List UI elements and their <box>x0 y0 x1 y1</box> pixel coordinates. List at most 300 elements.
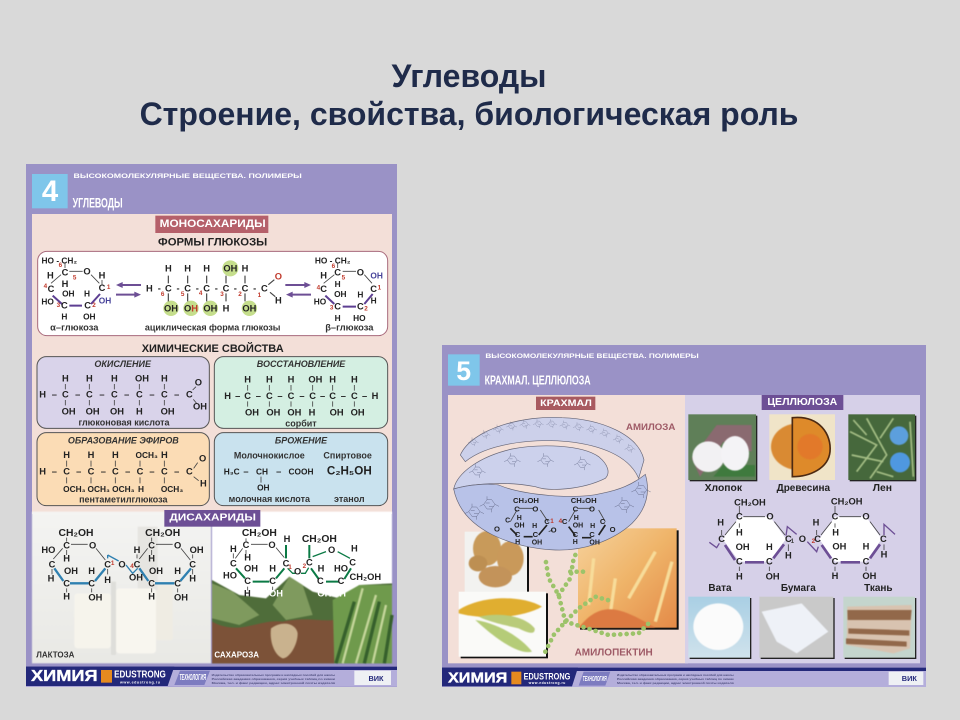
chart: amylose ribbon: C <box>573 530 579 539</box>
chart: cellulose structure: H <box>785 551 792 561</box>
chart: alpha glucose <box>41 256 111 332</box>
panel: chemical properties: ХИМИЧЕСКИЕ СВОЙСТВА <box>142 342 284 355</box>
footer: poster 5: Издательство образовательных программ и наглядных пособий для школы <box>617 673 734 677</box>
chart: beta glucose: C <box>320 284 327 294</box>
footer: poster 5: Российская академия образования, серия учебных таблиц по химии <box>617 677 734 681</box>
panel: reduction: ВОССТАНОВЛЕНИЕ <box>257 359 346 369</box>
chart: sucrose: CH₂OH <box>242 528 277 539</box>
panel: fermentation: БРОЖЕНИЕ <box>275 436 328 446</box>
panel: reduction: H <box>266 374 273 384</box>
chart: acyclic glucose: - <box>158 283 161 293</box>
chart: cellulose structure: C <box>880 534 887 544</box>
chart: beta glucose: C <box>370 284 377 294</box>
chart: sucrose: C <box>230 558 237 568</box>
chart: acyclic glucose: 3 <box>220 291 224 298</box>
chart: alpha glucose: 4 <box>44 283 48 290</box>
chart: lactose: C <box>88 579 95 589</box>
chart: alpha glucose: H <box>99 271 106 281</box>
chart: beta glucose: HO <box>314 296 327 306</box>
chart: beta glucose: 6 <box>332 263 336 270</box>
chart: alpha glucose: OH <box>62 288 75 298</box>
panel: oxidation: H <box>161 373 168 383</box>
chart: alpha glucose: H <box>62 279 69 289</box>
arrows: right equilibrium <box>285 282 311 298</box>
panel: fermentation: COOH <box>288 467 313 477</box>
panel: ester formation: – <box>125 467 130 477</box>
chart: sucrose: O <box>268 540 276 550</box>
chart: amylose ribbon: C <box>573 504 579 513</box>
chart: cellulose structure: O <box>799 534 806 544</box>
panel: poster 5 header: 5 <box>456 356 471 386</box>
chart: cellulose structure: H <box>813 518 820 528</box>
panel: poster 4 header: ВЫСОКОМОЛЕКУЛЯРНЫЕ ВЕЩЕСТВА. ПОЛИМЕРЫ <box>73 173 302 180</box>
chart: alpha glucose: 1 <box>107 284 111 291</box>
chart: beta glucose: OH <box>334 289 347 299</box>
chart: amylose ribbon: C <box>514 504 520 513</box>
chart: alpha glucose: OH <box>83 311 96 321</box>
chart: amylose ribbon: H <box>590 523 595 530</box>
chart: acyclic glucose: 5 <box>181 291 185 298</box>
panel: ester formation: – <box>76 467 81 477</box>
footer: poster 4: EDUSTRONG <box>114 669 166 680</box>
chart: sucrose: H <box>230 544 237 554</box>
chart: sucrose: OH <box>269 588 283 598</box>
chart: lactose: OH <box>88 593 103 603</box>
chart: lactose: OH <box>190 545 204 555</box>
panel: reduction: – <box>299 391 305 401</box>
panel: fermentation: C₂H₅OH <box>327 464 372 477</box>
chart: amylose ribbon: C <box>600 517 606 526</box>
panel: reduction: C <box>351 391 358 401</box>
panel: starch: АМИЛОЗА <box>626 422 676 432</box>
chart: amylose ribbon: OH <box>514 522 525 529</box>
panel: fermentation: – <box>276 467 281 477</box>
chart: amylose ribbon: O <box>532 504 538 513</box>
panel: starch: АМИЛОПЕКТИН <box>575 647 653 658</box>
panel: ester formation: H <box>63 450 70 460</box>
panel: oxidation: C <box>161 389 168 399</box>
chart: lactose: H <box>174 566 181 576</box>
chart: beta glucose: β–глюкоза <box>325 322 374 332</box>
chart: sucrose: C <box>338 576 345 586</box>
footer: poster 4: Издательство образовательных программ и наглядных пособий для школы <box>212 673 335 677</box>
panel: reduction: OH <box>287 408 302 418</box>
panel: ester formation: OCH₃ <box>112 484 135 494</box>
chart: cellulose structure: OH <box>862 571 877 581</box>
panel: ester formation: C <box>63 467 70 477</box>
panel: monosaccharides: ФОРМЫ ГЛЮКОЗЫ <box>158 237 267 249</box>
panel: oxidation: – <box>99 389 105 399</box>
chart: alpha glucose: 5 <box>73 274 77 281</box>
chart: alpha glucose: C <box>62 267 69 277</box>
panel: cellulose: ЦЕЛЛЮЛОЗА <box>767 397 837 408</box>
chart: lactose: CH₂OH <box>145 528 180 539</box>
panel: fermentation: Спиртовое <box>323 450 372 460</box>
chart: sucrose: H <box>318 563 325 573</box>
panel: fermentation: этанол <box>334 494 365 504</box>
chart: sucrose: H <box>351 543 358 553</box>
panel: reduction: H <box>309 408 316 418</box>
chart: acyclic glucose: C <box>242 283 249 293</box>
chart: amylose ribbon: OH <box>532 539 542 546</box>
photo: sugar beet and cane <box>212 512 392 663</box>
panel: fermentation <box>214 433 388 506</box>
panel: monosaccharides <box>32 214 392 514</box>
panel: reduction: – <box>320 391 325 401</box>
chart: alpha glucose: H <box>84 288 90 298</box>
chart: acyclic glucose: OH <box>223 263 238 273</box>
panel: oxidation: H <box>62 373 69 383</box>
chart: lactose: H <box>104 575 111 585</box>
chart: acyclic glucose: - <box>234 283 237 293</box>
photo: cotton <box>688 414 757 481</box>
panel: ester formation: ОБРАЗОВАНИЕ ЭФИРОВ <box>68 436 179 446</box>
chart: acyclic glucose: H <box>242 263 249 273</box>
chart: acyclic glucose: - <box>253 283 256 293</box>
chart: alpha glucose: C <box>48 284 55 294</box>
chart: lactose: ЛАКТОЗА <box>36 650 75 659</box>
chart: cellulose structure: 2 <box>812 538 816 545</box>
chart: lactose: OH <box>149 566 163 576</box>
panel: ester formation: H <box>112 450 119 460</box>
panel: oxidation: – <box>174 389 179 399</box>
chart: amylose ribbon: H <box>532 523 537 530</box>
chart: beta glucose: 5 <box>342 274 346 281</box>
photo: paper <box>759 597 835 659</box>
panel: reduction: OH <box>245 408 259 418</box>
panel: starch: КРАХМАЛ <box>540 398 592 408</box>
panel: cellulose: Хлопок <box>705 483 743 494</box>
chart: alpha glucose: 3 <box>57 302 61 309</box>
chart: cellulose structure: 1 <box>791 538 795 545</box>
chart: alpha glucose: 6 <box>59 262 63 269</box>
panel: ester formation: O <box>199 453 206 463</box>
chart: cellulose structure: H <box>766 542 773 552</box>
chart: sucrose: H <box>244 588 251 598</box>
chart: alpha glucose: O <box>83 266 91 276</box>
label: disaccharides heading <box>164 510 260 527</box>
chart: sucrose: H <box>284 534 291 544</box>
chart: alpha glucose: C <box>84 301 91 311</box>
chart: sucrose: C <box>244 576 251 586</box>
chart: alpha glucose: C <box>61 301 68 311</box>
chart: cellulose structure: CH₂OH <box>734 497 766 507</box>
chart: beta glucose: C <box>334 267 341 277</box>
panel: oxidation: O <box>195 377 202 387</box>
chart: cellulose structure: C <box>814 534 821 544</box>
panel: reduction: C <box>266 391 273 401</box>
chart: sucrose: H <box>269 563 276 573</box>
chart: acyclic glucose: ациклическая форма глюкозы <box>145 322 281 332</box>
panel: reduction: H <box>244 374 251 384</box>
photo: wheat <box>578 528 679 630</box>
chart: cellulose structure: C <box>736 557 743 567</box>
chart: acyclic glucose: C <box>223 283 230 293</box>
panel: oxidation: – <box>149 389 155 399</box>
chart: lactose: C <box>49 559 56 569</box>
chart: beta glucose: O <box>357 267 364 277</box>
chart: acyclic glucose: OH <box>203 303 218 313</box>
chart: beta glucose: 4 <box>317 284 321 291</box>
chart: cellulose structure: O <box>766 512 774 522</box>
footer: poster 4: Москва, тел. и факс редакции, адрес электронной почты издателя <box>212 681 335 685</box>
footer: poster 5: ХИМИЯ <box>448 670 507 686</box>
panel: oxidation: H <box>86 373 93 383</box>
title: Углеводы <box>392 58 546 94</box>
chart: cellulose structure: C <box>766 557 773 567</box>
panel: ester formation <box>37 433 209 506</box>
chart: acyclic glucose: 2 <box>238 291 242 298</box>
chart: acyclic glucose: OH <box>242 303 257 313</box>
chart: beta glucose: HO <box>353 313 366 323</box>
chart: lactose: C <box>104 559 111 569</box>
chart: amylose ribbon <box>454 417 651 550</box>
chart: lactose: HO <box>41 545 55 555</box>
chart: sucrose: C <box>283 558 290 568</box>
panel: oxidation: C <box>186 389 193 399</box>
photo: wood <box>769 414 835 480</box>
chart: cellulose structure: O <box>862 512 870 522</box>
chart: acyclic glucose: C <box>184 283 191 293</box>
chart: lactose: C <box>148 579 155 589</box>
panel: ester formation: – <box>101 467 106 477</box>
panel: ester formation: пентаметилглюкоза <box>79 494 169 504</box>
panel: ester formation: – <box>52 467 57 477</box>
panel: cellulose: Лен <box>873 483 892 494</box>
panel: ester formation: OCH₃ <box>63 484 86 494</box>
chart: cellulose structure: H <box>832 527 839 537</box>
chart: lactose: O <box>174 541 181 551</box>
photo: fabric <box>843 597 916 659</box>
panel: oxidation: – <box>124 389 129 399</box>
panel: ester formation: C <box>186 467 193 477</box>
chart: amylose ribbon: C <box>589 530 595 539</box>
chart: beta glucose: HO - CH₂ <box>315 256 351 266</box>
chart: cellulose structure: C <box>736 512 743 522</box>
panel: fermentation: Молочнокислое <box>234 450 305 460</box>
panel: fermentation: молочная кислота <box>229 494 311 504</box>
panel: reduction: C <box>288 391 295 401</box>
chart: alpha glucose: 2 <box>92 302 96 309</box>
footer: poster 4: ВИК <box>368 674 384 683</box>
panel: cellulose <box>685 395 920 663</box>
panel: ester formation: OCH₃ <box>135 450 158 460</box>
title <box>140 58 798 132</box>
panel: reduction: H <box>224 391 231 401</box>
chart: amylose ribbon: OH <box>573 522 583 529</box>
footer: poster 5: Москва, тел. и факс редакции, адрес электронной почты издателя <box>617 681 734 685</box>
panel: fermentation: CH <box>256 467 268 477</box>
chart: amylose ribbon: O <box>494 524 500 533</box>
panel: ester formation: H <box>200 478 207 488</box>
chart: lactose: OH <box>129 573 143 583</box>
footer: poster 4: ХИМИЯ <box>31 668 98 685</box>
chart: sucrose: OH <box>317 588 332 598</box>
chart: sucrose: C <box>243 540 250 550</box>
panel: reduction: сорбит <box>285 418 317 428</box>
panel: oxidation: OH <box>62 406 76 416</box>
panel: ester formation: C <box>88 467 95 477</box>
chart: amylose ribbon: CH₂OH <box>571 496 597 505</box>
chart: amylose ribbon: H <box>574 515 579 522</box>
chart: sucrose: HO <box>334 563 348 573</box>
chart: lactose: C <box>148 541 155 551</box>
chart: acyclic glucose: - <box>215 283 218 293</box>
photo: cotton wool <box>688 597 751 659</box>
poster: starch and cellulose 5 <box>442 345 926 687</box>
chart: sucrose: CH₂OH <box>302 534 337 545</box>
panel: reduction: OH <box>351 408 365 418</box>
chart: lactose: O <box>89 541 96 551</box>
panel: reduction: – <box>341 391 346 401</box>
chart: lactose: H <box>148 592 155 602</box>
chart: sucrose: H <box>339 588 346 598</box>
chart: amylose ribbon: H <box>515 539 520 546</box>
panel: reduction: H <box>288 374 295 384</box>
chart: beta glucose: H <box>320 271 327 281</box>
label: disaccharides heading: ДИСАХАРИДЫ <box>169 512 256 523</box>
panel: poster 4 header: 4 <box>42 175 59 208</box>
poster: carbohydrates 4 <box>26 164 397 687</box>
chart: beta glucose <box>314 256 383 332</box>
panel: ester formation: – <box>149 467 155 477</box>
chart: lactose: 1 <box>111 560 115 567</box>
chart: lactose: H <box>63 553 70 563</box>
chart: acyclic glucose: OH <box>184 303 198 313</box>
chart: cellulose structure: CH₂OH <box>831 497 863 507</box>
chart: cellulose structure: OH <box>736 542 750 552</box>
chart: beta glucose: C <box>357 302 364 312</box>
chart: amylose ribbon: C <box>562 517 568 526</box>
panel: reduction: H <box>372 391 379 401</box>
chart: alpha glucose: H <box>47 271 54 281</box>
chart: beta glucose: 3 <box>330 304 334 311</box>
photo: flax <box>848 414 916 481</box>
photo: corn <box>459 592 548 658</box>
panel: oxidation: C <box>62 389 69 399</box>
chart: amylose ribbon: C <box>533 530 539 539</box>
chart: acyclic glucose: H <box>184 263 191 273</box>
chart: lactose <box>36 528 204 659</box>
panel: fermentation: H₃C <box>224 467 240 477</box>
chart: acyclic glucose: O <box>275 272 282 282</box>
panel: oxidation: C <box>136 389 143 399</box>
chart: sucrose: H <box>244 553 251 563</box>
panel: ester formation: OCH₃ <box>87 484 110 494</box>
chart: acyclic glucose: 4 <box>199 290 203 297</box>
chart: amylose ribbon: 1 <box>550 518 554 525</box>
panel: oxidation: глюконовая кислота <box>78 418 171 428</box>
chart: cellulose structure <box>709 497 895 582</box>
panel: oxidation <box>37 357 209 428</box>
chart: lactose: H <box>88 566 95 576</box>
chart: acyclic glucose: H <box>203 263 210 273</box>
chart: beta glucose: 1 <box>378 284 382 291</box>
chart: lactose: C <box>63 579 70 589</box>
panel: oxidation: H <box>39 389 46 399</box>
panel: poster 5 header <box>448 354 699 387</box>
chart: beta glucose: OH <box>370 271 383 281</box>
panel: cellulose: Ткань <box>864 583 893 594</box>
chart: lactose: H <box>134 545 141 555</box>
panel: ester formation: H <box>161 450 168 460</box>
panel: reduction: – <box>362 391 367 401</box>
chart: amylose ribbon: O <box>610 525 616 534</box>
chart: cellulose structure: C <box>832 557 839 567</box>
footer: poster 5 <box>442 668 926 687</box>
chart: sucrose: 2 <box>303 563 307 570</box>
chart: cellulose structure: H <box>736 572 743 582</box>
chart: sucrose: C <box>306 557 313 567</box>
chart: amylose ribbon: C <box>544 517 550 526</box>
panel: oxidation: OH <box>161 406 175 416</box>
chart: acyclic glucose: 6 <box>161 291 165 298</box>
chart: lactose: H <box>148 553 155 563</box>
chart: alpha glucose: α–глюкоза <box>50 322 99 332</box>
chart: cellulose structure: OH <box>766 572 780 582</box>
chart: acyclic glucose: C <box>203 283 210 293</box>
panel: starch <box>448 395 688 663</box>
footer: poster 5: EDUSTRONG <box>524 672 570 682</box>
panel: reduction: H <box>329 374 336 384</box>
footer: poster 5: ТЕХНОЛОГИЯ <box>583 674 607 683</box>
chart: acyclic glucose <box>145 260 282 332</box>
chart: beta glucose: C <box>334 302 341 312</box>
chart: acyclic glucose: - <box>196 283 199 293</box>
chart: lactose: H <box>63 592 70 602</box>
chart: sucrose: C <box>269 576 276 586</box>
footer: poster 4: Российская академия образования, серия учебных таблиц по химии <box>212 677 335 681</box>
chart: sucrose: O <box>328 545 335 555</box>
chart: beta glucose: H <box>335 313 341 323</box>
chart: acyclic glucose: 1 <box>258 292 262 299</box>
chart: lactose: C <box>63 541 70 551</box>
panel: reduction: C <box>309 391 316 401</box>
chart: sucrose <box>214 528 381 659</box>
panel: ester formation: H <box>39 467 46 477</box>
chart: acyclic glucose: C <box>165 283 172 293</box>
panel: reduction: – <box>277 391 283 401</box>
chart: acyclic glucose: H <box>275 296 282 306</box>
chart: cellulose structure: H <box>881 549 888 559</box>
chart: cellulose structure: H <box>832 571 839 581</box>
panel: reduction: C <box>244 391 251 401</box>
chart: sucrose: CH₂OH <box>350 572 381 582</box>
chart: sucrose: OH <box>244 563 258 573</box>
photo: potatoes <box>465 531 529 595</box>
chart: lactose: O <box>118 559 126 569</box>
footer: poster 5: ВИК <box>902 674 917 683</box>
chart: sucrose: C <box>317 576 324 586</box>
chart: alpha glucose: H <box>61 311 67 321</box>
chart: acyclic glucose: C <box>261 283 268 293</box>
chart: lactose: 4 <box>130 563 134 570</box>
chart: acyclic glucose: H <box>146 283 153 293</box>
panel: ester formation: H <box>88 450 95 460</box>
footer: poster 4 <box>26 667 397 687</box>
panel: cellulose: Древесина <box>777 483 831 494</box>
chart: lactose: C <box>134 559 141 569</box>
chart: cellulose structure: C <box>785 534 792 544</box>
panel: chemical properties <box>37 342 388 506</box>
panel: poster 4 header: УГЛЕВОДЫ <box>73 194 123 210</box>
panel: fermentation: OH <box>257 483 270 493</box>
panel: monosaccharides: МОНОСАХАРИДЫ <box>160 218 266 230</box>
panel: poster 5 header: ВЫСОКОМОЛЕКУЛЯРНЫЕ ВЕЩЕСТВА. ПОЛИМЕРЫ <box>485 354 699 360</box>
chart: amylose ribbon: OH <box>589 539 600 546</box>
chart: alpha glucose: C <box>99 283 106 293</box>
chart: alpha glucose: OH <box>99 296 111 306</box>
